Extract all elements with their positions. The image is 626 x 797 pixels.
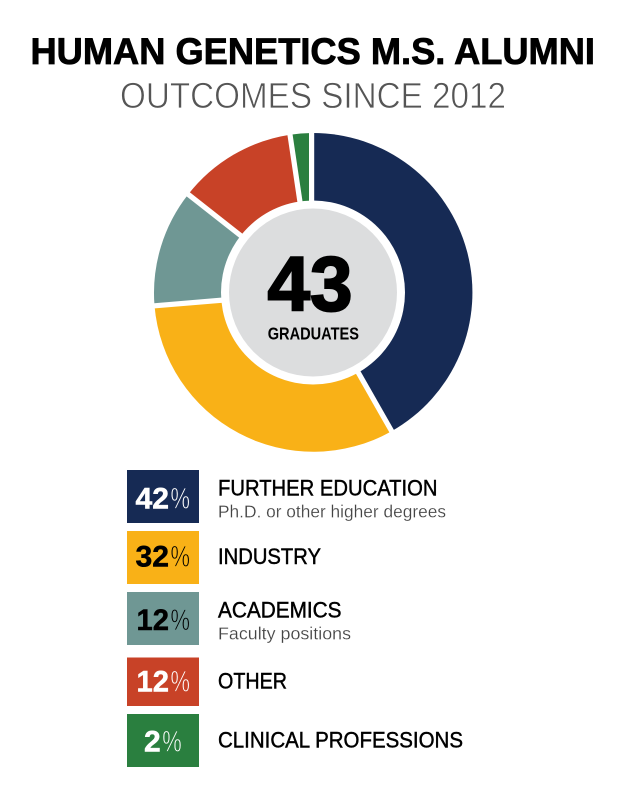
legend row: further education: 42 [136, 482, 169, 515]
legend row: academics: % [170, 604, 190, 637]
segment: industry 32% [154, 292, 392, 452]
legend row: industry [127, 531, 321, 584]
segment: further education 42% [312, 133, 472, 431]
legend row: further education: % [170, 482, 190, 515]
legend [127, 470, 463, 767]
legend row: clinical professions: CLINICAL PROFESSIONS [218, 727, 463, 752]
legend row: academics: 12 [136, 604, 169, 637]
legend row: industry: % [170, 541, 190, 574]
legend row: industry: 32 [136, 541, 169, 574]
legend row: clinical professions: % [162, 726, 182, 759]
legend row: academics: ACADEMICS [218, 597, 342, 622]
title: HUMAN GENETICS M.S. ALUMNI [30, 30, 595, 72]
donut chart [150, 128, 472, 452]
legend row: industry: INDUSTRY [218, 544, 321, 569]
legend row: academics [127, 592, 351, 645]
legend row: further education: FURTHER EDUCATION [218, 476, 438, 501]
legend row: clinical professions [127, 714, 463, 767]
legend row: further education: Ph.D. or other higher degrees [218, 501, 446, 521]
segment: academics 12% [154, 194, 313, 306]
centre number: 43 [268, 242, 352, 328]
centre label: GRADUATES [268, 323, 359, 343]
legend row: other [127, 658, 287, 706]
segment: clinical professions 2% [290, 133, 313, 292]
legend row: other: % [170, 666, 190, 699]
segment: other 12% [188, 135, 313, 292]
subtitle: OUTCOMES SINCE 2012 [120, 75, 506, 116]
donut centre circle [229, 208, 397, 376]
legend row: academics: Faculty positions [218, 623, 351, 643]
legend row: clinical professions: 2 [144, 726, 161, 759]
legend row: other: 12 [136, 666, 169, 699]
legend row: other: OTHER [218, 668, 287, 693]
legend row: further education [127, 470, 446, 523]
